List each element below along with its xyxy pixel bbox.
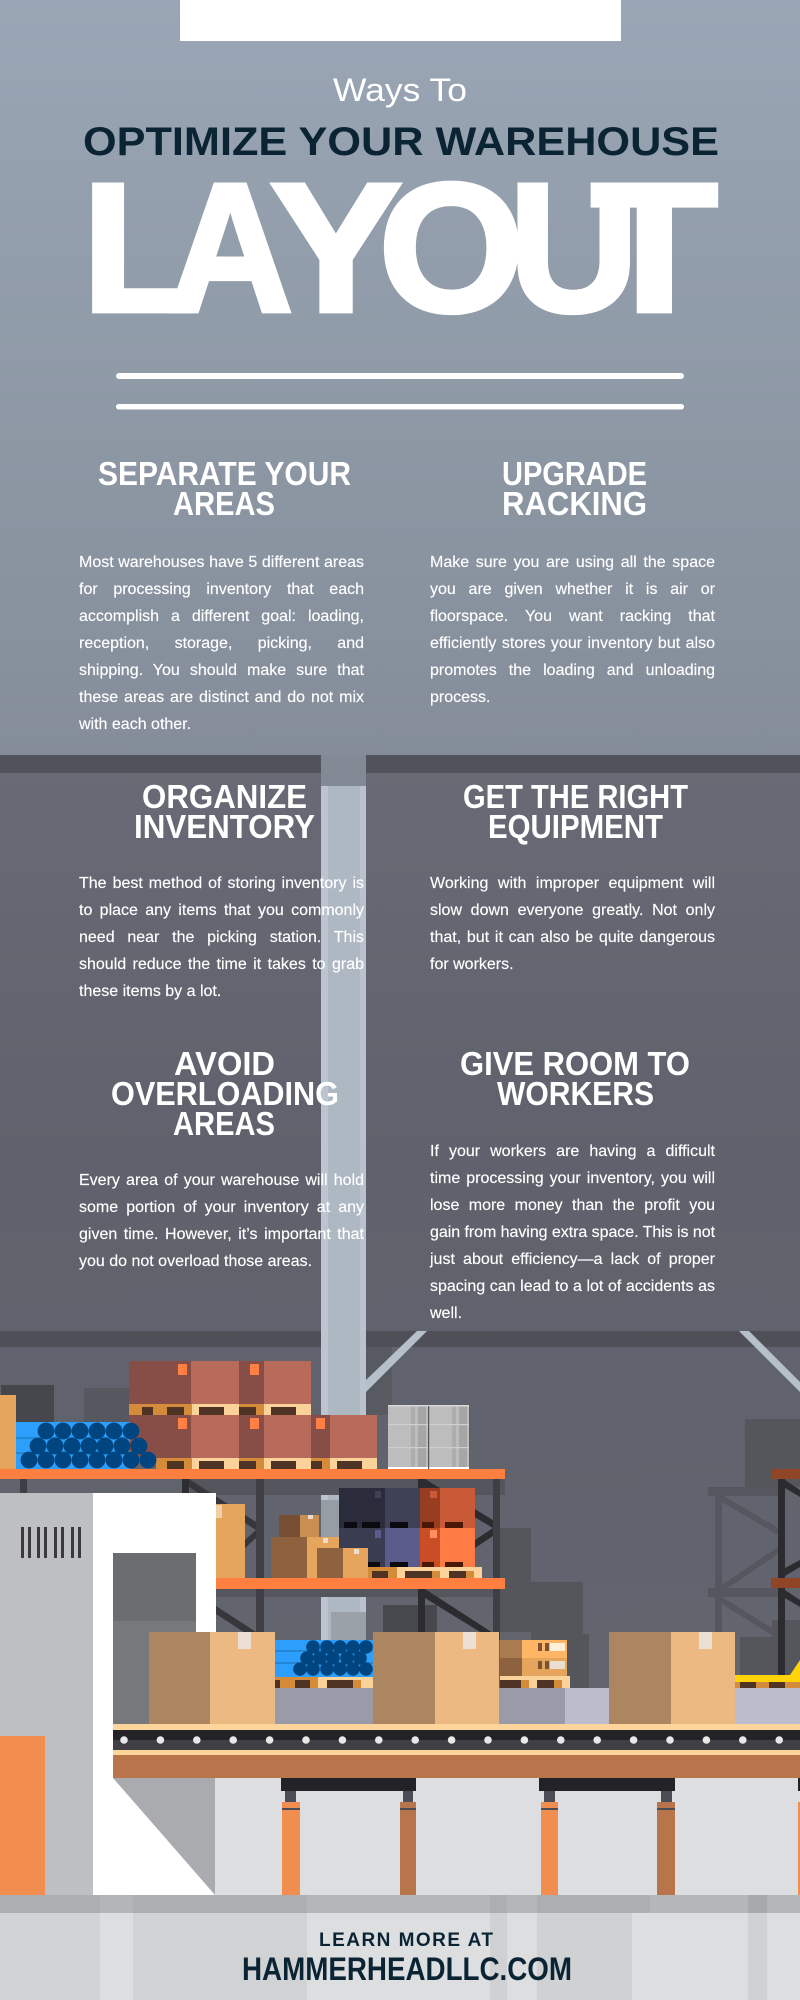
large box 2: [373, 1632, 499, 1724]
text: avoid overloading areas body: some portion of your inventory at any: [79, 1199, 364, 1216]
roof brace: right: [739, 1331, 800, 1392]
text: give room to workers body: gain from having extra space. This is not: [430, 1224, 715, 1241]
text: give room to workers body: spacing can lead to a lot of accidents as: [430, 1278, 715, 1295]
text: avoid overloading areas body: you do not overload those areas.: [79, 1253, 312, 1270]
heading: give room to workers: GIVE ROOM TO: [460, 1045, 690, 1082]
text: separate your areas body: Most warehouses have 5 different areas: [79, 554, 364, 571]
text: get the right equipment body: Working with improper equipment will: [430, 875, 715, 892]
text: give room to workers body: just about efficiency—a lack of proper: [430, 1251, 715, 1268]
large box 1: [149, 1632, 275, 1724]
heading: organize inventory: INVENTORY: [134, 808, 315, 845]
text: upgrade racking body: Make sure you are using all the space: [430, 554, 715, 571]
text: give room to workers body: [430, 1143, 716, 1322]
title: layout: A: [168, 145, 293, 350]
text: organize inventory body: to place any items that you commonly: [79, 902, 364, 919]
box: far left upper shelf: [0, 1395, 16, 1469]
panel: avoid overloading areas: [79, 1045, 364, 1270]
text: organize inventory body: should reduce the time it takes to grab: [79, 956, 364, 973]
heading: separate your areas: SEPARATE YOUR: [98, 455, 351, 492]
text: upgrade racking body: promotes the loading and unloading: [430, 662, 715, 679]
footer: learn more at: LEARN MORE AT: [319, 1930, 493, 1951]
conveyor support: right: [539, 1778, 800, 1895]
box: behind truck: [216, 1504, 245, 1578]
heading: give room to workers: [460, 1045, 690, 1112]
background: distant shapes: [1, 1385, 800, 1688]
text: get the right equipment body: for workers.: [430, 956, 514, 973]
background: warehouse wall: [0, 756, 800, 1896]
title rule: lower: [116, 404, 684, 410]
back rack: right: [708, 1487, 780, 1640]
text: avoid overloading areas body: Every area of your warehouse will hold: [79, 1172, 364, 1189]
heading: organize inventory: [134, 778, 315, 845]
text: avoid overloading areas body: given time. However, it’s important that: [79, 1226, 364, 1243]
text: give room to workers body: If your workers are having a difficult: [430, 1143, 715, 1160]
title: layout: T: [591, 146, 718, 350]
front rack: left frame: [20, 1479, 264, 1640]
heading: give room to workers: WORKERS: [497, 1075, 654, 1112]
heading: get the right equipment: EQUIPMENT: [488, 808, 663, 845]
text: get the right equipment body: that, but it can also be quite dangerous: [430, 929, 715, 946]
text: upgrade racking body: process.: [430, 689, 490, 706]
footer: website: HAMMERHEADLLC.COM: [242, 1951, 572, 1987]
text: separate your areas body: [78, 554, 364, 733]
panel: upgrade racking: [430, 455, 715, 706]
text: get the right equipment body: [430, 875, 715, 973]
crates: upper shelf top row: [129, 1361, 311, 1415]
ceiling beam: lower: [0, 1331, 800, 1347]
text: upgrade racking body: floorspace. You want racking that: [430, 608, 715, 625]
heading: get the right equipment: [463, 778, 688, 845]
heading: upgrade racking: [502, 455, 647, 522]
small boxes: conveyor: [499, 1640, 609, 1724]
title: layout: L: [82, 146, 197, 351]
white top tab: [180, 0, 621, 41]
title: layout: O: [379, 146, 524, 351]
text: organize inventory body: need near the picking station. This: [79, 929, 364, 946]
title: layout: U: [509, 146, 639, 350]
small boxes: middle shelf: [271, 1515, 368, 1578]
heading: avoid overloading areas: AREAS: [173, 1105, 275, 1142]
panel: organize inventory: [79, 778, 364, 1000]
ceiling beam: upper: [0, 755, 800, 773]
front rack: right frame: [771, 1469, 800, 1675]
heading: avoid overloading areas: [111, 1045, 339, 1142]
truck wall panel: [0, 1493, 216, 1895]
floor strip and reflection: [0, 1895, 800, 2000]
text: get the right equipment body: slow down everyone greatly. Not only: [430, 902, 715, 919]
roof brace: left: [366, 1331, 427, 1392]
title: ways to: Ways To: [333, 72, 467, 108]
large box 3: [609, 1632, 735, 1724]
conveyor belt: [113, 1724, 800, 1778]
text: organize inventory body: The best method of storing inventory is: [79, 875, 364, 892]
heading: organize inventory: ORGANIZE: [142, 778, 307, 815]
text: upgrade racking body: efficiently stores your inventory but also: [430, 635, 715, 652]
conveyor support: left: [281, 1778, 416, 1895]
text: separate your areas body: reception, storage, picking, and: [79, 635, 364, 652]
heading: separate your areas: [98, 455, 351, 522]
heading: upgrade racking: RACKING: [502, 485, 647, 522]
structural pillar: [321, 755, 392, 1646]
text: upgrade racking body: [430, 554, 715, 706]
barrels: upper shelf: [388, 1405, 469, 1469]
title: optimize your warehouse: OPTIMIZE YOUR WAREHOUSE: [83, 120, 719, 164]
title: layout: [82, 145, 718, 351]
blue pipes: conveyor: [275, 1640, 373, 1724]
text: separate your areas body: for processing inventory that each: [79, 581, 364, 598]
background: upper sky panel: [0, 0, 800, 756]
text: upgrade racking body: you are given whether it is air or: [430, 581, 715, 598]
text: separate your areas body: accomplish a different goal: loading,: [79, 608, 364, 625]
text: organize inventory body: [79, 875, 364, 1000]
heading: avoid overloading areas: OVERLOADING: [111, 1075, 339, 1112]
text: organize inventory body: these items by a lot.: [79, 983, 221, 1000]
front rack: centre frame: [418, 1479, 500, 1640]
text: give room to workers body: well.: [430, 1305, 462, 1322]
shelf: upper orange: [0, 1469, 505, 1479]
heading: separate your areas: AREAS: [173, 485, 275, 522]
heading: get the right equipment: GET THE RIGHT: [463, 778, 688, 815]
text: avoid overloading areas body: [79, 1172, 364, 1270]
heading: upgrade racking: UPGRADE: [502, 455, 647, 492]
crates: upper shelf bottom row: [129, 1415, 377, 1469]
text: separate your areas body: with each other.: [79, 716, 191, 733]
text: separate your areas body: these areas are distinct and do not mix: [79, 689, 364, 706]
shelf: middle orange: [216, 1578, 505, 1589]
panel: get the right equipment: [430, 778, 715, 973]
panel: separate your areas: [78, 455, 364, 733]
pallet: middle shelf: [368, 1567, 482, 1578]
text: separate your areas body: shipping. You should make sure that: [79, 662, 364, 679]
blue pipes: upper shelf: [16, 1422, 156, 1469]
dark and orange crates: middle shelf: [339, 1488, 475, 1567]
text: give room to workers body: time processing your inventory, you will: [430, 1170, 715, 1187]
title: layout: Y: [270, 146, 402, 351]
heading: avoid overloading areas: AVOID: [174, 1045, 275, 1082]
yellow forklift and pallet: [735, 1660, 800, 1724]
wall under conveyor: [113, 1778, 800, 1895]
panel: give room to workers: [430, 1045, 716, 1322]
truck orange door: [0, 1736, 45, 1895]
title rule: upper: [116, 373, 684, 379]
text: give room to workers body: lose more money than the profit you: [430, 1197, 715, 1214]
truck barcode icon: [21, 1527, 81, 1558]
